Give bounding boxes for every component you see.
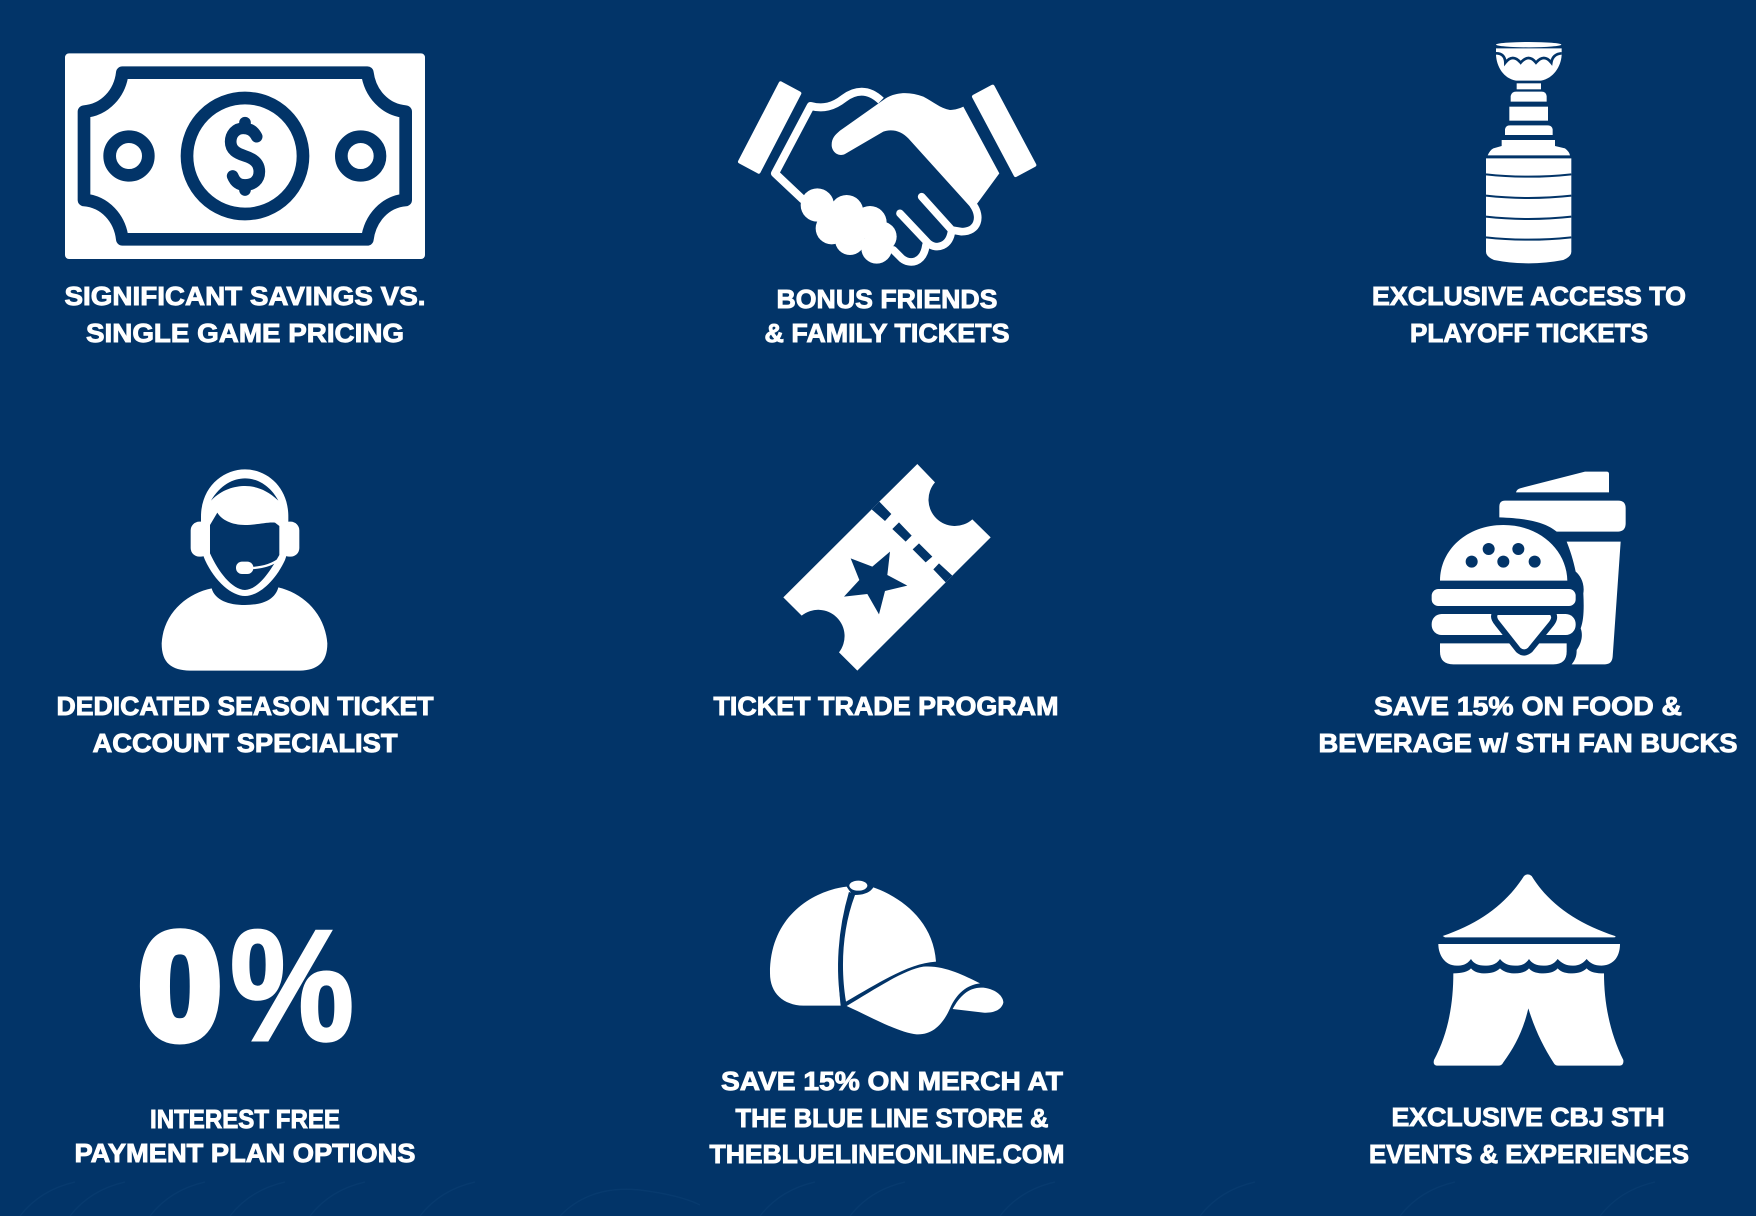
label: account specialist	[56, 691, 434, 758]
label: merch discount: THE BLUE LINE STORE &	[736, 1103, 1048, 1133]
icon: event tent	[1434, 874, 1623, 1066]
icon: dollar bill	[65, 53, 425, 259]
label: merch discount	[710, 1066, 1064, 1169]
label: food and beverage: BEVERAGE w/ STH FAN BUCKS	[1318, 728, 1738, 758]
panel: food and beverage	[1318, 472, 1738, 758]
label: merch discount: THEBLUELINEONLINE.COM	[710, 1139, 1064, 1169]
label: bonus tickets: & FAMILY TICKETS	[764, 318, 1010, 348]
icon: zero percent: %	[230, 898, 354, 1074]
panel: exclusive events	[1369, 874, 1689, 1169]
label: payment plan: PAYMENT PLAN OPTIONS	[74, 1138, 416, 1168]
label: playoff access: PLAYOFF TICKETS	[1410, 318, 1648, 348]
label: bonus tickets: BONUS FRIENDS	[776, 284, 998, 314]
icon: stanley cup	[1486, 42, 1571, 263]
label: account specialist: DEDICATED SEASON TICKET	[56, 691, 434, 721]
panel: significant savings	[64, 53, 426, 348]
label: playoff access	[1372, 281, 1686, 348]
panel: account specialist	[56, 469, 434, 758]
label: exclusive events: EXCLUSIVE CBJ STH	[1392, 1102, 1664, 1132]
label: ticket trade: TICKET TRADE PROGRAM	[714, 691, 1058, 721]
label: playoff access: EXCLUSIVE ACCESS TO	[1372, 281, 1686, 311]
label: significant savings	[64, 281, 426, 348]
icon: baseball cap	[770, 881, 1003, 1034]
label: payment plan: INTEREST FREE	[150, 1104, 340, 1134]
label: significant savings: SIGNIFICANT SAVINGS VS.	[64, 281, 426, 311]
label: food and beverage: SAVE 15% ON FOOD &	[1374, 691, 1682, 721]
icon: zero percent: 0	[139, 902, 221, 1070]
label: merch discount: SAVE 15% ON MERCH AT	[721, 1066, 1063, 1096]
label: exclusive events	[1369, 1102, 1689, 1169]
icon: burger and drink	[1432, 472, 1626, 664]
icon: handshake	[740, 83, 1034, 264]
icon: zero percent	[139, 898, 354, 1074]
panel: bonus tickets	[740, 83, 1034, 348]
panel: merch discount	[710, 881, 1064, 1169]
panel: playoff access	[1372, 42, 1686, 348]
label: account specialist: ACCOUNT SPECIALIST	[92, 728, 398, 758]
label: bonus tickets	[764, 284, 1010, 348]
panel: payment plan	[74, 898, 416, 1168]
label: significant savings: SINGLE GAME PRICING	[86, 318, 404, 348]
icon: agent with headset	[162, 469, 327, 671]
label: exclusive events: EVENTS & EXPERIENCES	[1369, 1139, 1689, 1169]
panel: ticket trade	[714, 464, 1058, 721]
icon: ticket with star	[783, 464, 991, 671]
label: payment plan	[74, 1104, 416, 1168]
label: food and beverage	[1318, 691, 1738, 758]
